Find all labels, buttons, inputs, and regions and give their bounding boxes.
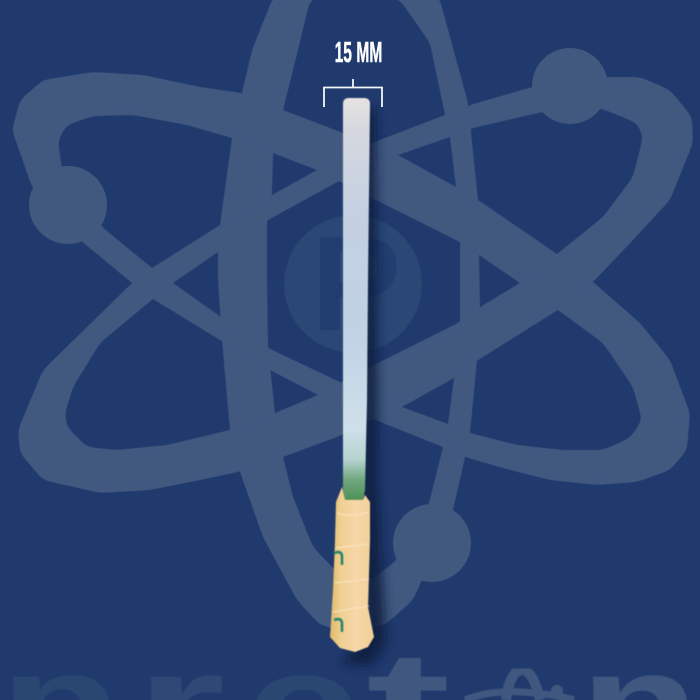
orbit rising to the right [18,77,693,493]
grip logo marks [334,552,342,632]
central P emblem [284,208,422,359]
racket grip [330,487,374,652]
electron top right [532,48,608,124]
grip tape wraps [333,512,369,612]
electron left [29,166,107,244]
vertical orbit [218,0,480,632]
electron bottom right [393,504,471,582]
central P emblem: P [311,208,401,359]
racket shadow [342,108,386,665]
dimension bracket [324,79,382,107]
brand wordmark, cropped at page bottom [0,620,699,700]
wordmark atom letter [465,670,574,700]
dimension label: 15 MM [335,36,382,68]
racket [330,98,374,652]
racket blade [343,98,370,500]
orbit falling to the right [12,72,690,485]
